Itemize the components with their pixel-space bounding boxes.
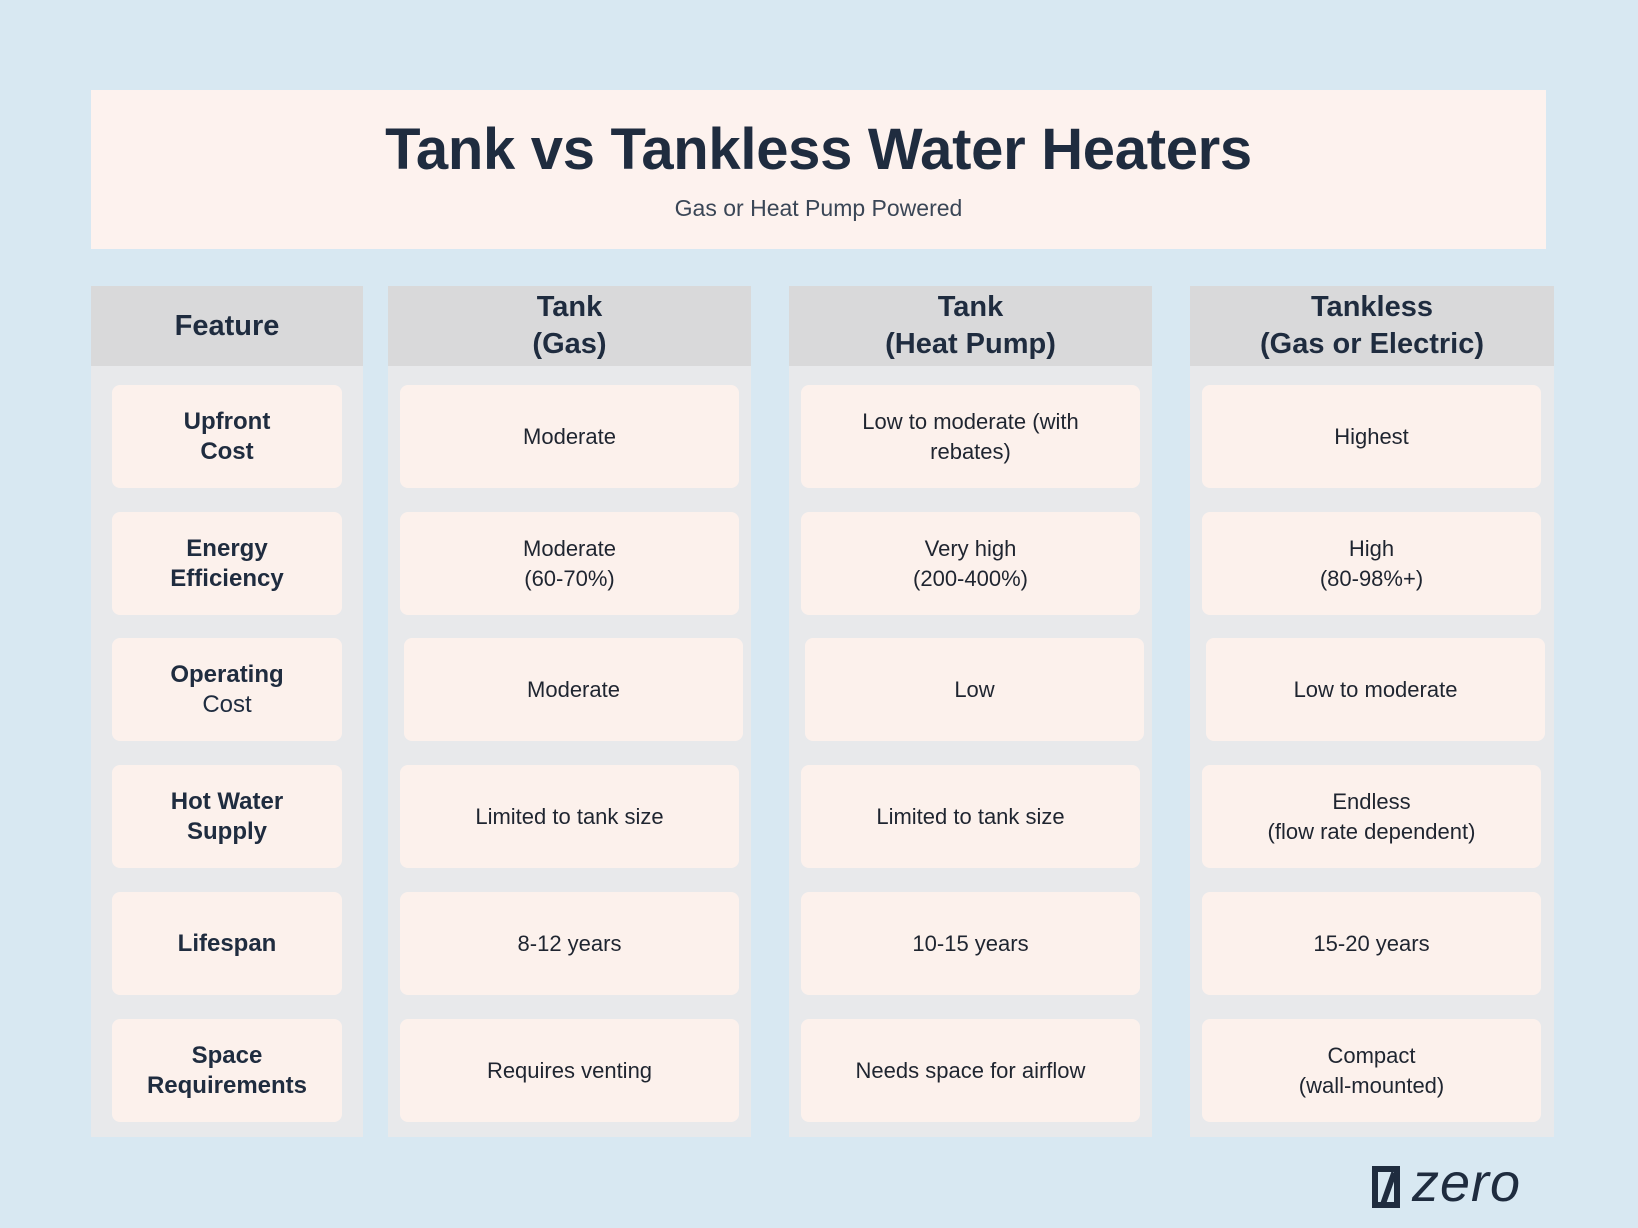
cell: (80-98%+): [1320, 566, 1423, 590]
cell: rebates): [930, 438, 1011, 464]
label: operating cost: Operating: [170, 660, 284, 688]
label: energy efficiency: Efficiency: [170, 564, 284, 592]
cell: Endless: [1332, 788, 1411, 814]
cell: Low to moderate (with: [862, 408, 1079, 434]
label: lifespan: [112, 892, 342, 995]
cell: Moderate: [523, 536, 616, 560]
label: upfront cost: Cost: [200, 438, 254, 464]
header: tank gas: Tank: [537, 291, 602, 323]
header: tankless: [1190, 286, 1554, 366]
cell: (200-400%): [913, 566, 1028, 590]
header: tank gas: [388, 286, 751, 366]
cell: [400, 892, 739, 995]
cell: [1206, 638, 1545, 741]
column: tank heat pump: [789, 286, 1152, 1137]
header: feature: [91, 286, 363, 366]
cell: [1202, 512, 1541, 615]
label: operating cost: Cost: [202, 690, 252, 718]
cell: Requires venting: [487, 1058, 652, 1082]
cell: [801, 385, 1140, 488]
cell: [1202, 765, 1541, 868]
cell: [805, 638, 1144, 741]
cell: [1202, 1019, 1541, 1122]
label: hot water supply: Hot Water: [171, 788, 283, 814]
label: hot water supply: Supply: [187, 818, 267, 844]
label: operating cost: [112, 638, 342, 741]
cell: High: [1349, 536, 1394, 560]
header: tank gas: (Gas): [532, 328, 607, 360]
label: hot water supply: [112, 765, 342, 868]
wordmark: zero: [1412, 1153, 1521, 1213]
column: tank gas: [388, 286, 751, 1137]
cell: (60-70%): [524, 566, 615, 590]
cell: 8-12 years: [518, 930, 621, 956]
cell: Needs space for airflow: [856, 1058, 1085, 1082]
cell: [801, 765, 1140, 868]
cell: Very high: [925, 536, 1016, 560]
cell: [400, 385, 739, 488]
cell: [1202, 892, 1541, 995]
column: feature: [91, 286, 363, 1137]
cell: 15-20 years: [1313, 930, 1430, 956]
label: energy efficiency: Energy: [186, 534, 268, 562]
cell: Compact: [1327, 1042, 1416, 1068]
title panel: [91, 90, 1546, 249]
cell: (wall-mounted): [1299, 1072, 1444, 1098]
heading: Tank vs Tankless Water Heaters: [385, 117, 1252, 182]
cell: [404, 638, 743, 741]
column: tankless: [1190, 286, 1554, 1137]
label: space requirements: Requirements: [147, 1072, 307, 1098]
cell: Moderate: [527, 676, 620, 702]
cell: [801, 512, 1140, 615]
icon: logo mark: [1372, 1166, 1400, 1208]
cell: Low to moderate: [1294, 676, 1457, 702]
cell: 10-15 years: [912, 930, 1029, 956]
cell: [801, 892, 1140, 995]
cell: Limited to tank size: [475, 804, 664, 828]
cell: Highest: [1334, 424, 1409, 448]
cell: [400, 1019, 739, 1122]
header: tank heat pump: [789, 286, 1152, 366]
logo: zero: [1372, 1153, 1521, 1213]
cell: Limited to tank size: [876, 804, 1065, 828]
cell: [1202, 385, 1541, 488]
header: tank heat pump: Tank: [938, 291, 1003, 323]
cell: [801, 1019, 1140, 1122]
label: lifespan: Lifespan: [178, 930, 276, 956]
cell: Low: [954, 676, 995, 702]
cell: (flow rate dependent): [1268, 818, 1475, 844]
subtitle: Gas or Heat Pump Powered: [675, 195, 962, 221]
label: upfront cost: Upfront: [184, 408, 270, 434]
header: tankless: Tankless: [1311, 291, 1433, 323]
header: tankless: (Gas or Electric): [1260, 328, 1484, 360]
label: energy efficiency: [112, 512, 342, 615]
cell: [400, 765, 739, 868]
header: tank heat pump: (Heat Pump): [885, 328, 1056, 360]
label: space requirements: [112, 1019, 342, 1122]
header: feature: Feature: [175, 310, 279, 342]
cell: Moderate: [523, 424, 616, 448]
label: space requirements: Space: [192, 1042, 262, 1068]
label: upfront cost: [112, 385, 342, 488]
cell: [400, 512, 739, 615]
